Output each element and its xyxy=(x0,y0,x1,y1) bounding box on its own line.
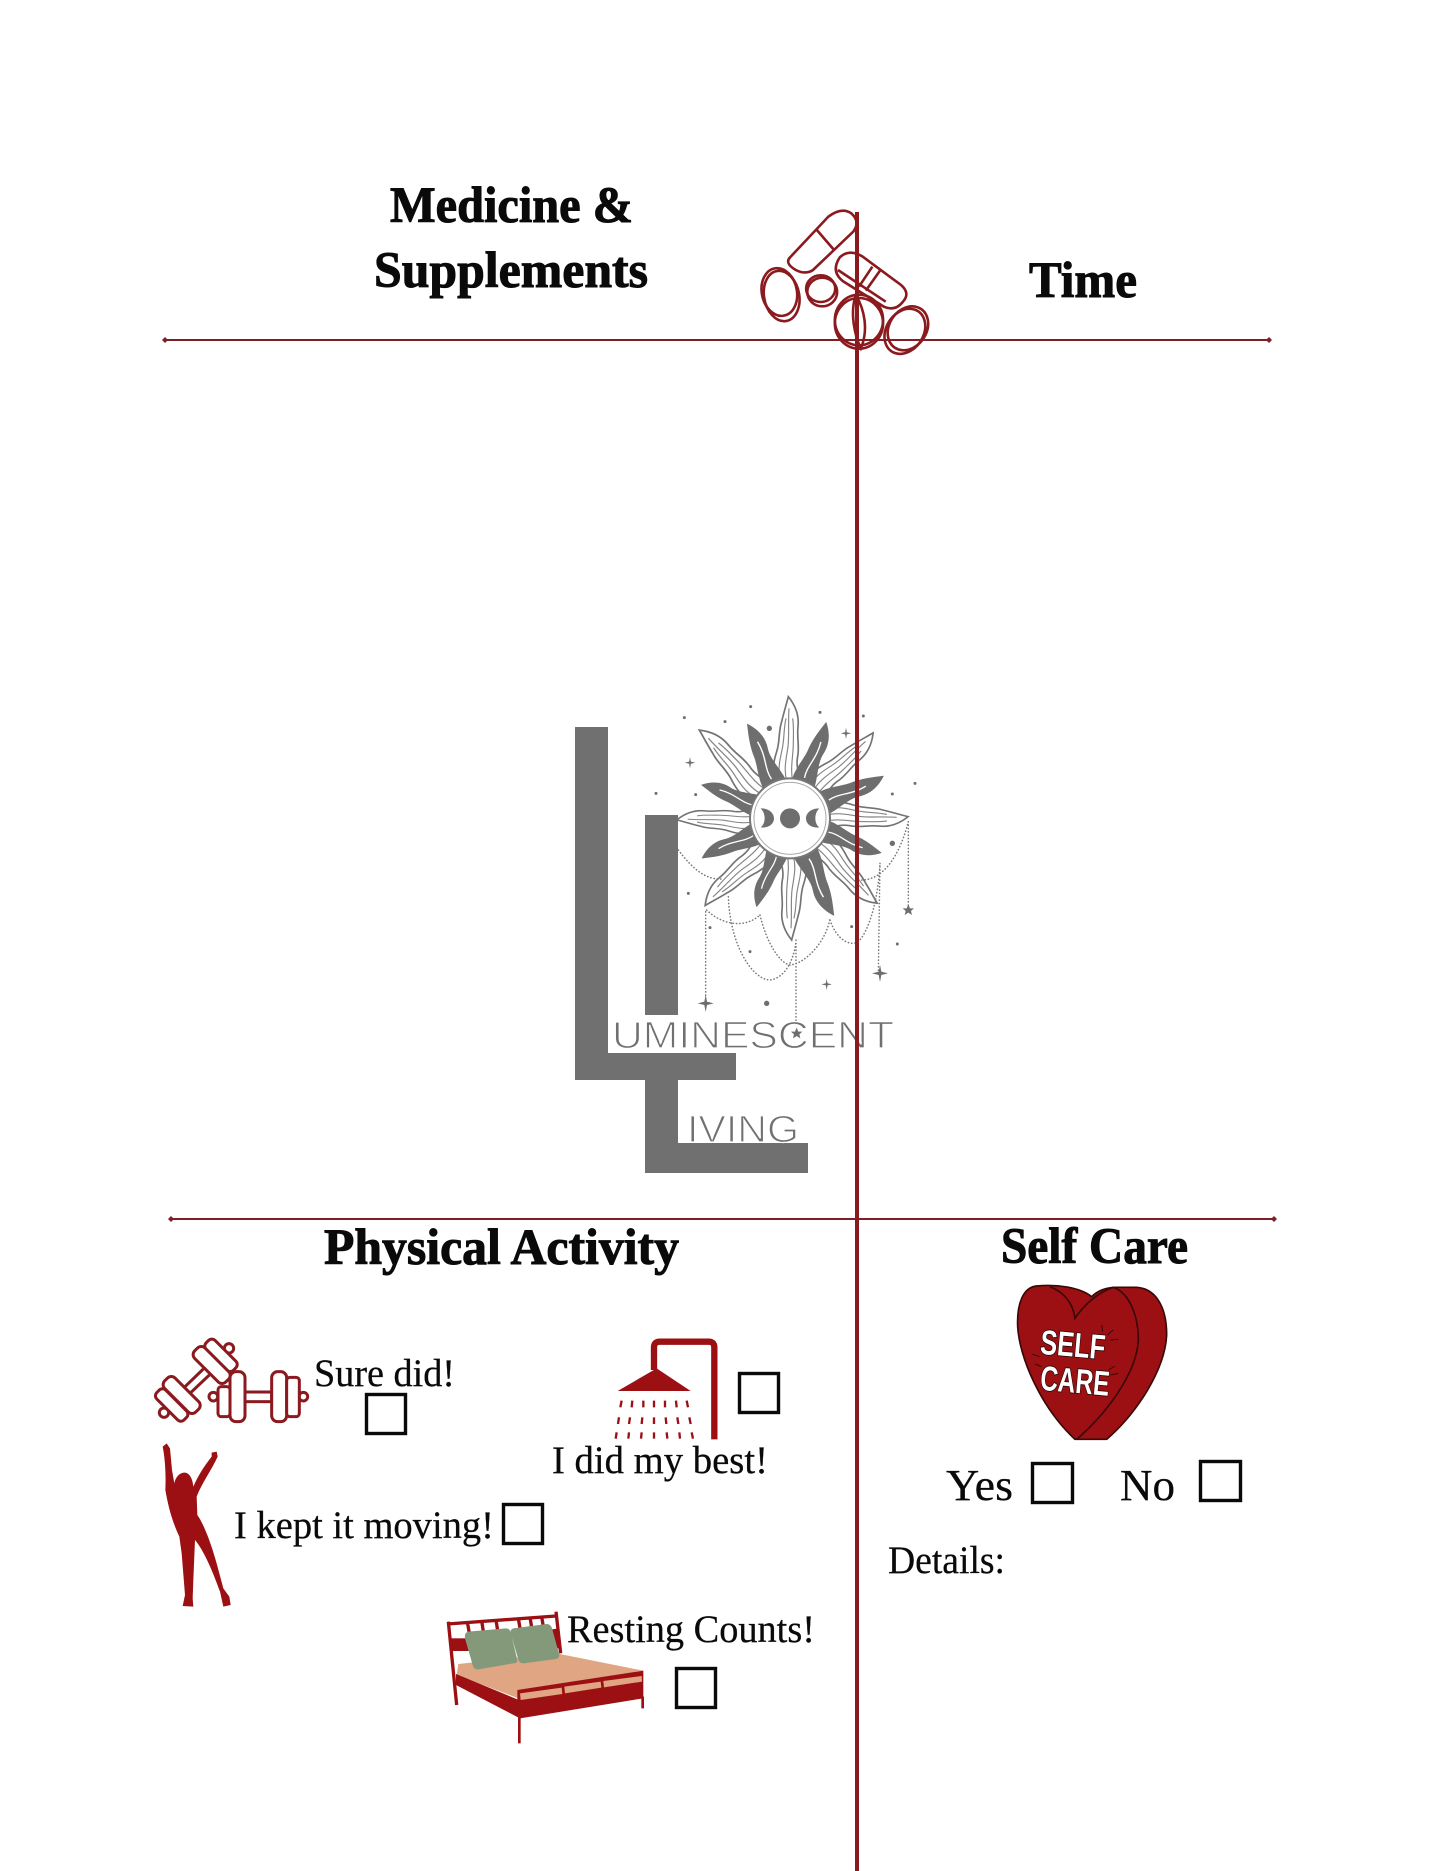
heading: Medicine & Supplements xyxy=(374,178,648,299)
heading: Self Care: Self Care xyxy=(1001,1219,1188,1275)
panel: self care xyxy=(888,1219,1240,1582)
option: Sure did: Sure did! xyxy=(314,1352,455,1395)
heading: Medicine & Supplements: Medicine & xyxy=(390,178,633,234)
icon: dumbbells xyxy=(154,1337,308,1423)
lower horizontal divider xyxy=(168,1216,1277,1222)
option: Yes xyxy=(946,1461,1072,1510)
option: Resting Counts: Resting Counts! xyxy=(567,1608,815,1651)
vertical divider xyxy=(855,212,859,1871)
heading: Physical Activity: Physical Activity xyxy=(324,1220,679,1276)
option: Yes: Yes xyxy=(946,1461,1013,1510)
option: I kept it moving: I kept it moving! xyxy=(234,1504,494,1547)
logo wordmark: UMINESCENT xyxy=(612,1015,894,1057)
panel: medicine and supplements header xyxy=(162,178,1272,343)
option: No: No xyxy=(1120,1461,1175,1510)
option: Resting Counts xyxy=(567,1608,815,1708)
heading: Time: Time xyxy=(1029,253,1137,309)
icon: self care heart: CARE xyxy=(1039,1360,1111,1404)
logo wordmark: IVING xyxy=(687,1109,799,1151)
icon: exercising woman silhouette xyxy=(163,1443,231,1607)
option: Sure did xyxy=(314,1352,455,1434)
panel: physical activity xyxy=(154,1220,815,1743)
label: Details: Details: xyxy=(888,1539,1005,1582)
sun and moon emblem xyxy=(654,697,916,1038)
icon: shower xyxy=(616,1342,714,1439)
heading: Medicine & Supplements: Supplements xyxy=(374,243,648,299)
icon: self care heart: SELF xyxy=(1039,1324,1107,1367)
icon: self care heart xyxy=(1018,1285,1167,1439)
logo letter L bars xyxy=(575,727,808,1173)
option: No xyxy=(1120,1461,1240,1510)
logo: Luminescent Living xyxy=(575,697,916,1173)
icon: bed xyxy=(447,1612,643,1743)
option: I did my best xyxy=(552,1374,778,1482)
icon: pills xyxy=(758,211,935,359)
top horizontal divider xyxy=(162,337,1272,343)
logo wordmark xyxy=(612,1015,894,1151)
option: I did my best: I did my best! xyxy=(552,1439,768,1482)
